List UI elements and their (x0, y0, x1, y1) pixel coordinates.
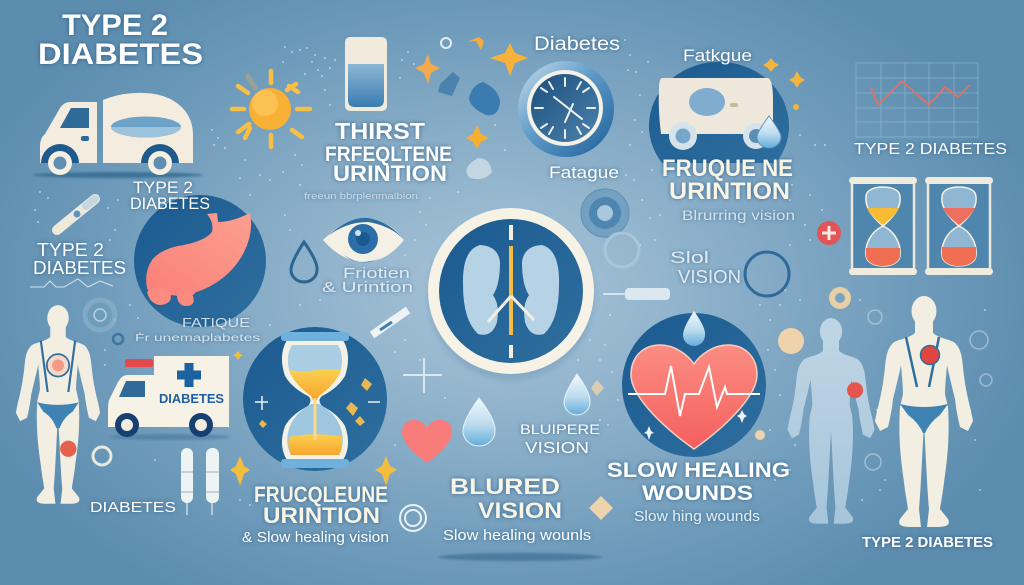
label: type 2 diabetes above stomach (130, 178, 210, 213)
icon: faint gear ring left (85, 300, 123, 344)
label: diabetes bottom left: DIABETES (90, 499, 176, 516)
heading: frequent urination bottom: URINTION (263, 503, 380, 528)
line chart (856, 63, 978, 137)
icon: truck in circle (649, 62, 789, 163)
label: type 2 diabetes left (33, 240, 126, 278)
icon: gold sparkles (230, 351, 397, 486)
label: frequent and urination: & Urintion (322, 279, 413, 296)
background specks (35, 40, 985, 505)
icon: syringe centre (372, 310, 408, 335)
icon: pair of hourglass frames (849, 177, 993, 275)
heading: frequent urination right: URINTION (669, 178, 790, 205)
heading: frequent urination right: FRUQUE NE (662, 155, 793, 182)
icon: ambulance: DIABETES (159, 391, 224, 406)
heading: thirst: freeun bbrplenmalbion (304, 191, 418, 201)
icon: water drop upper (564, 374, 590, 415)
icon: tan ring (832, 290, 848, 306)
icon: ambulance (108, 356, 230, 440)
label: blurred vision small: VISION (525, 440, 589, 457)
heading: slow healing wounds (607, 459, 790, 525)
heading: blurred vision (443, 474, 591, 544)
icon: stars near truck (763, 58, 805, 110)
heading: frequent urination right (662, 155, 795, 223)
heading: slow healing wounds: SLOW HEALING (607, 459, 790, 482)
label: fatigue left: FATIQUE (182, 315, 250, 330)
icon: small lens rings (581, 189, 639, 267)
icon: tan shapes (589, 328, 804, 520)
icon: clock top (518, 61, 614, 157)
shadow under blurred vision (438, 553, 602, 561)
figure: middle body (787, 318, 875, 524)
heading: thirst: URINTION (333, 161, 447, 186)
icon: small heart (402, 420, 452, 463)
label: blurred vision small (520, 421, 600, 457)
icon: outlined watch ring (745, 252, 789, 296)
figure: left body (16, 305, 100, 504)
heading: thirst: FRFEQLTENE (325, 143, 452, 166)
heading: frequent urination right: Blrurring vision (682, 207, 795, 223)
icon: water drop lower (463, 398, 495, 446)
title: DIABETES (38, 38, 203, 71)
heading: blurred vision: VISION (478, 498, 562, 523)
figure: right body (875, 296, 973, 527)
title: TYPE 2 (62, 9, 168, 42)
label: type 2 diabetes chart: TYPE 2 DIABETES (854, 141, 1007, 158)
icon: sun (232, 71, 310, 147)
icon: red cross badge (817, 221, 841, 245)
label: type 2 diabetes left: TYPE 2 (37, 240, 104, 260)
icon: water glass (345, 37, 387, 111)
heading: thirst (304, 118, 452, 201)
heading: blurred vision: Slow healing wounls (443, 527, 591, 544)
icon: pill capsule (603, 288, 670, 300)
label: slow vision: VISION (678, 267, 741, 287)
heading: frequent urination bottom: & Slow healing vision (242, 530, 389, 546)
icon: outlined drop (291, 242, 317, 282)
heading: thirst: THIRST (335, 118, 425, 144)
icon: delivery truck (33, 93, 203, 178)
icon: pen injector (57, 199, 95, 230)
icon: heart with pulse in circle (622, 311, 766, 457)
icon: stomach in circle (134, 195, 266, 327)
label: fatigue top: Fatkgue (683, 46, 752, 65)
heading: frequent urination bottom (242, 482, 389, 546)
heading: frequent urination bottom: FRUCQLEUNE (254, 482, 388, 507)
label: fatigue left: Fr unemaplabetes (135, 333, 260, 344)
label: type 2 diabetes bottom right: TYPE 2 DIABETES (862, 534, 993, 551)
label: blurred vision small: BLUIPERE (520, 421, 600, 437)
label: slow vision (670, 248, 741, 287)
icon: faint rings right (865, 310, 992, 470)
title (38, 9, 203, 71)
label: fatigue: Fatague (549, 163, 619, 182)
icon: hourglass in circle (243, 327, 387, 471)
label: frequent and urination: Friotien (343, 265, 410, 282)
icon: syringes (181, 448, 219, 515)
label: type 2 diabetes left: DIABETES (33, 258, 126, 278)
icon: pulse line (30, 279, 113, 287)
label: fatigue left (135, 315, 260, 344)
icon: crosshair (403, 358, 442, 393)
heading: slow healing wounds: Slow hing wounds (634, 508, 760, 525)
icon: stars and droplet cluster (415, 37, 528, 179)
icon: kidney clock center (427, 208, 595, 380)
icon: ring cluster (93, 447, 111, 465)
label: diabetes: Diabetes (534, 34, 620, 55)
heading: blurred vision: BLURED (450, 474, 560, 499)
icon: concentric ring (400, 505, 426, 531)
label: type 2 diabetes above stomach: TYPE 2 (133, 178, 193, 197)
heading: slow healing wounds: WOUNDS (642, 482, 753, 505)
icon: eye (323, 218, 404, 262)
label: frequent and urination (322, 265, 413, 296)
label: type 2 diabetes above stomach: DIABETES (130, 194, 210, 213)
label: slow vision: Slol (670, 248, 709, 267)
